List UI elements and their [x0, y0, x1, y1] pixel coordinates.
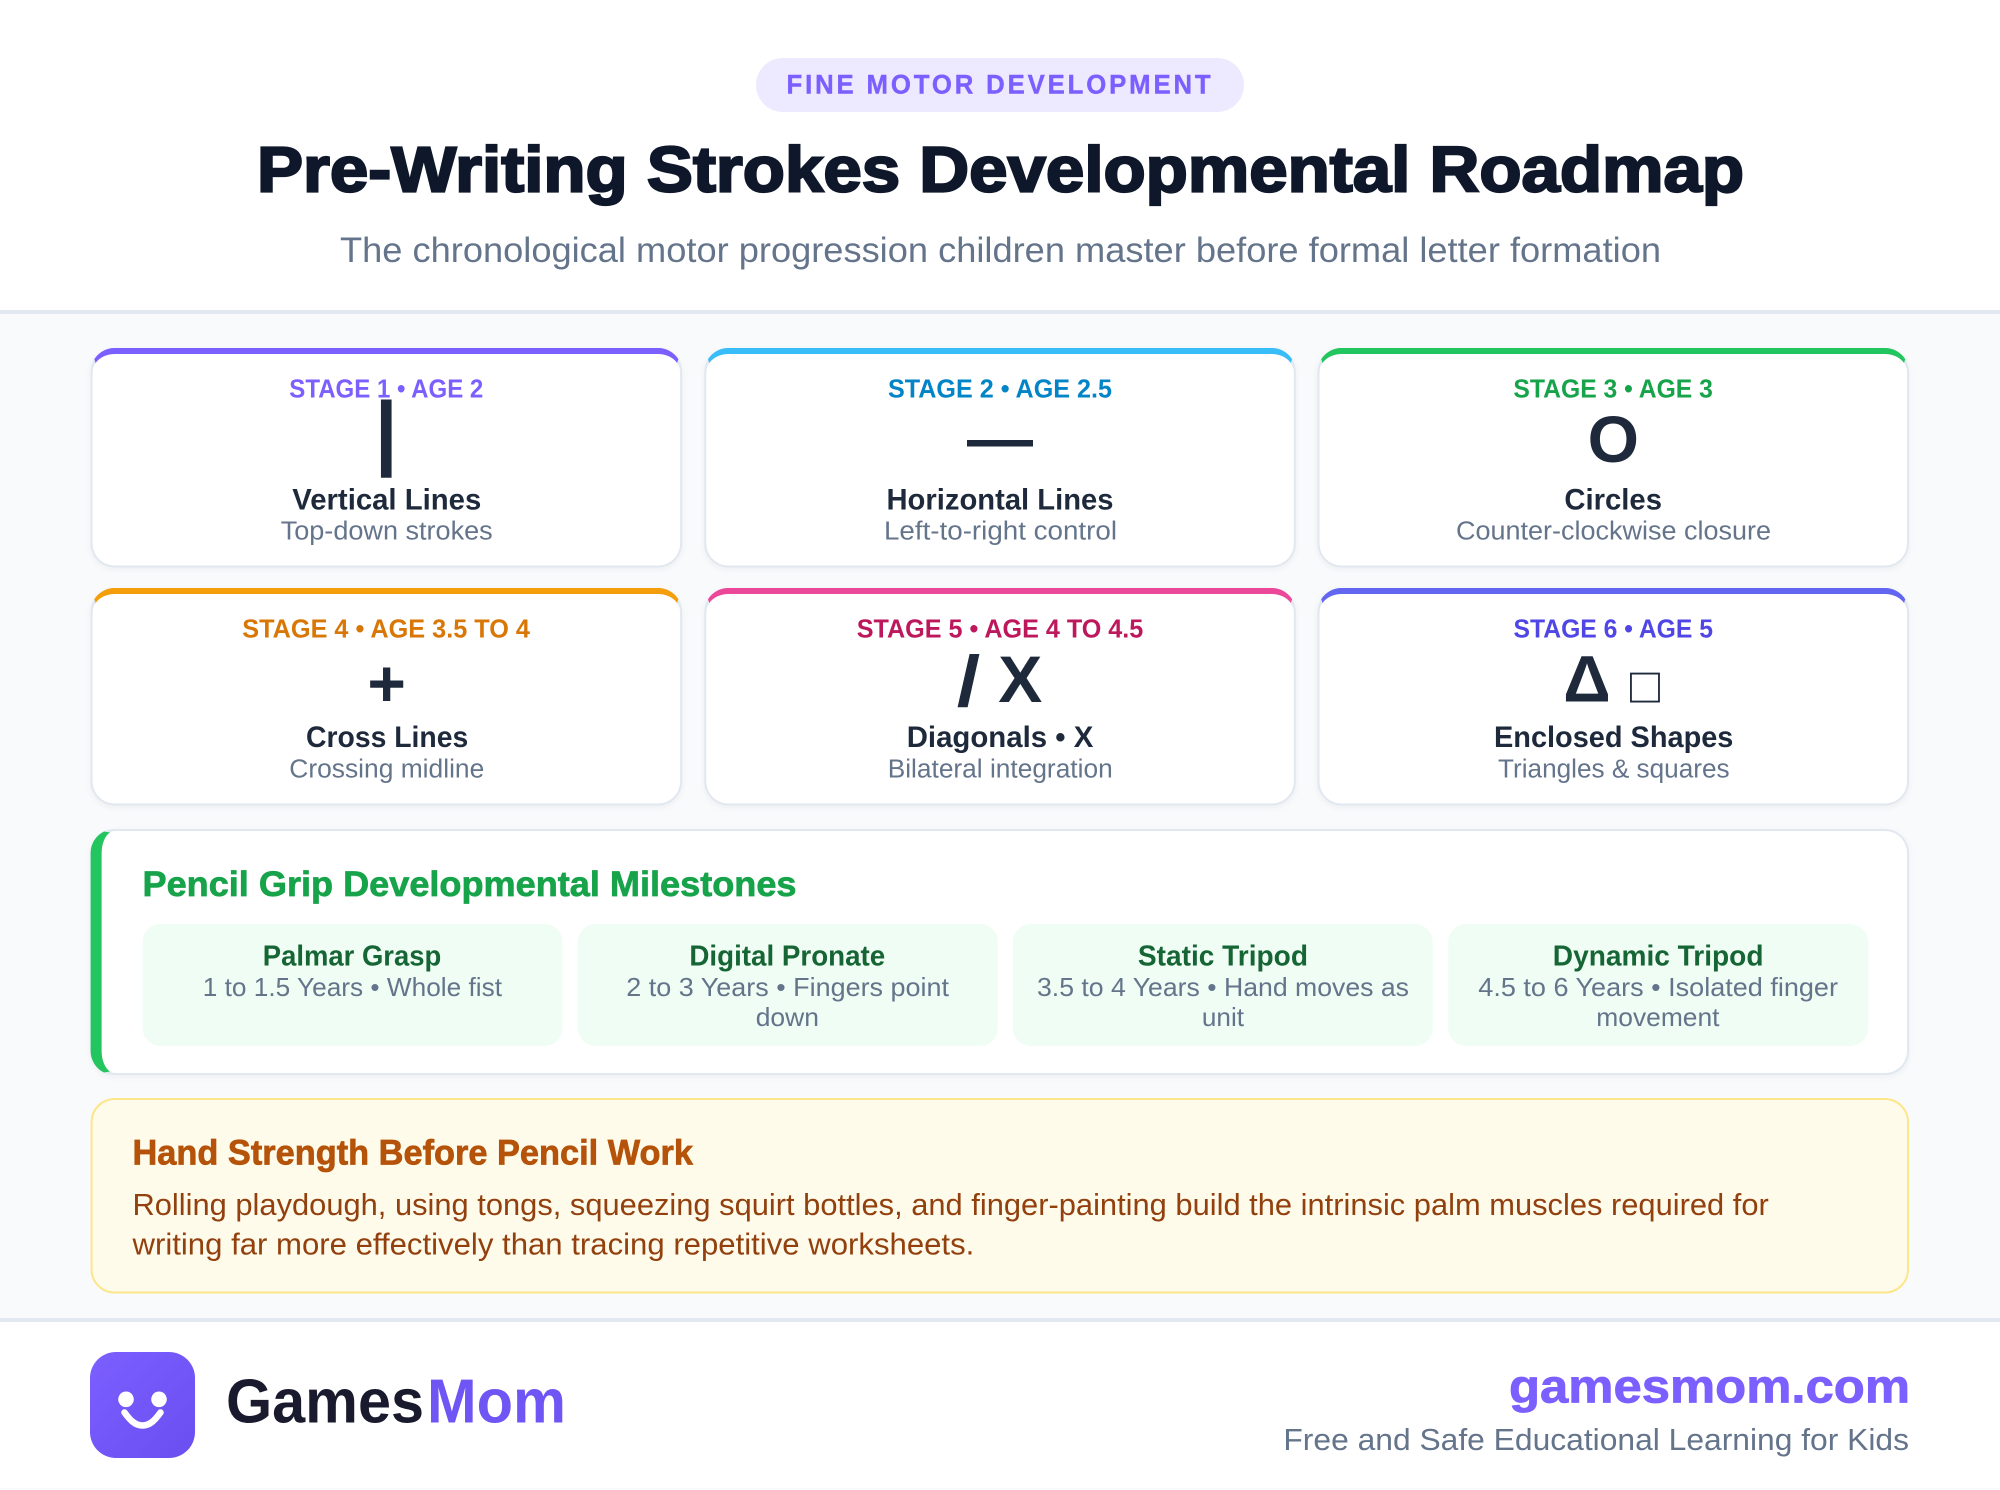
subtitle: The chronological motor progression children master before formal letter formation: [340, 230, 1661, 270]
icon: GamesMom smiley logo: [90, 1352, 195, 1458]
stage name: Horizontal Lines: [886, 483, 1114, 516]
panel: stage 6 enclosed shapes: [1318, 588, 1909, 806]
panel: stage 2 horizontal lines: [704, 348, 1296, 568]
stroke symbol: cross: +: [367, 646, 406, 720]
stroke symbols: triangle and square: □: [1630, 658, 1661, 714]
stage label: STAGE 3 • AGE 3: [1513, 376, 1713, 404]
title: Pre-Writing Strokes Developmental Roadmap: [257, 134, 1744, 206]
footer: [0, 1318, 2000, 1488]
stage label: STAGE 1 • AGE 2: [289, 376, 483, 404]
milestone: digital pronate: Digital Pronate: [689, 940, 885, 972]
milestone: palmar grasp: [142, 924, 562, 1046]
stroke symbol: circle: O: [1588, 402, 1639, 476]
stage description: Triangles & squares: [1498, 754, 1730, 784]
stroke symbol: diagonal and X: /: [957, 643, 981, 722]
milestone: palmar grasp: Palmar Grasp: [263, 940, 441, 972]
stroke symbols: triangle and square: [1563, 642, 1661, 716]
brand wordmark: Mom: [427, 1368, 566, 1437]
stage label: STAGE 2 • AGE 2.5: [888, 376, 1112, 404]
header: [0, 0, 2000, 314]
milestone: palmar grasp: 1 to 1.5 Years • Whole fist: [203, 974, 502, 1002]
stroke symbol: diagonal and X: X: [998, 642, 1042, 716]
stage label: STAGE 4 • AGE 3.5 TO 4: [242, 616, 531, 644]
brand wordmark: Games: [226, 1368, 424, 1437]
brand wordmark: [226, 1368, 566, 1437]
milestone: static tripod: [1013, 924, 1433, 1046]
stage description: Counter-clockwise closure: [1456, 515, 1771, 545]
stage name: Diagonals • X: [907, 721, 1094, 754]
milestone: static tripod: Static Tripod: [1138, 940, 1308, 972]
website url: gamesmom.com: [1509, 1360, 1910, 1413]
milestone: static tripod: unit: [1202, 1004, 1244, 1032]
callout: hand strength: [92, 1099, 1908, 1292]
milestone: dynamic tripod: movement: [1596, 1004, 1719, 1032]
milestone: dynamic tripod: Dynamic Tripod: [1553, 940, 1763, 972]
milestone: dynamic tripod: [1448, 924, 1868, 1046]
stage description: Bilateral integration: [888, 754, 1113, 784]
stage name: Enclosed Shapes: [1494, 721, 1733, 754]
stage name: Cross Lines: [306, 721, 468, 754]
stage label: STAGE 6 • AGE 5: [1514, 615, 1713, 643]
stage name: Circles: [1564, 483, 1662, 516]
panel: stage 5 diagonals: [704, 588, 1296, 806]
stage description: Top-down strokes: [281, 515, 493, 545]
heading: Pencil Grip Developmental Milestones: [142, 865, 796, 904]
stroke symbol: horizontal line: —: [967, 401, 1033, 475]
stage description: Crossing midline: [289, 754, 484, 784]
panel: stage 3 circles: [1318, 348, 1909, 568]
milestone: digital pronate: 2 to 3 Years • Fingers point: [626, 974, 949, 1002]
stage name: Vertical Lines: [292, 483, 481, 516]
callout heading: Hand Strength Before Pencil Work: [132, 1133, 694, 1172]
panel: pencil grip milestones: [91, 829, 1909, 1075]
stroke symbol: diagonal and X: [957, 642, 1042, 722]
callout body: Rolling playdough, using tongs, squeezing squirt bottles, and finger-painting build the intrinsic palm muscles required for: [132, 1187, 1769, 1222]
stage description: Left-to-right control: [884, 515, 1117, 545]
milestone: digital pronate: down: [756, 1004, 819, 1032]
stroke symbols: triangle and square: Δ: [1563, 642, 1611, 716]
badge: fine motor development: FINE MOTOR DEVELOPMENT: [786, 70, 1214, 100]
panel: stage 4 cross lines: [91, 588, 682, 806]
stroke symbol: vertical line: |: [375, 384, 398, 478]
stage label: STAGE 5 • AGE 4 TO 4.5: [857, 615, 1143, 643]
milestone: static tripod: 3.5 to 4 Years • Hand moves as: [1037, 974, 1409, 1002]
panel: stage 1 vertical lines: [91, 348, 682, 568]
milestone: dynamic tripod: 4.5 to 6 Years • Isolated finger: [1478, 974, 1838, 1002]
tagline: Free and Safe Educational Learning for Kids: [1283, 1422, 1909, 1457]
callout body: [131, 1187, 1769, 1262]
callout body: writing far more effectively than tracing repetitive worksheets.: [131, 1226, 974, 1262]
badge: fine motor development: [756, 58, 1244, 112]
milestone: digital pronate: [578, 924, 998, 1046]
